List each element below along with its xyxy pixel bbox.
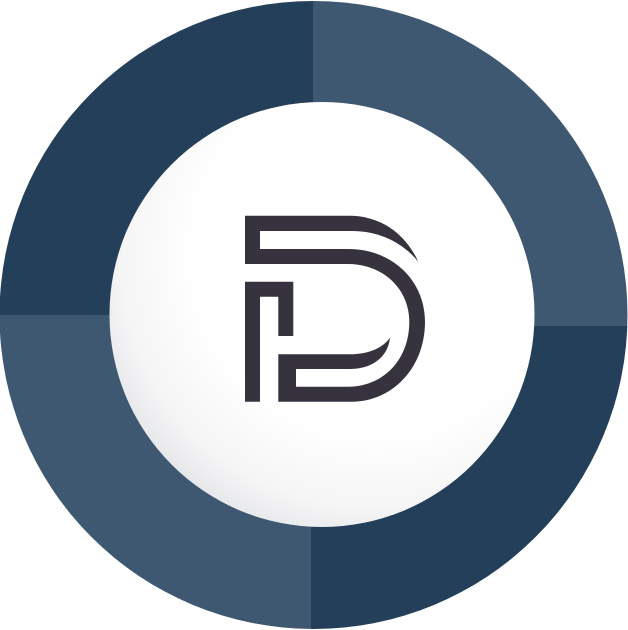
center circle: [110, 102, 534, 527]
segment: top right: [313, 0, 628, 326]
segment: bottom right: [311, 326, 628, 630]
logo: main D stroke: [245, 216, 425, 402]
logo: inner stem: [245, 282, 293, 402]
segment: bottom left: [0, 315, 313, 630]
segment: top left: [0, 0, 313, 315]
icon: stylised D logo: [245, 216, 425, 402]
